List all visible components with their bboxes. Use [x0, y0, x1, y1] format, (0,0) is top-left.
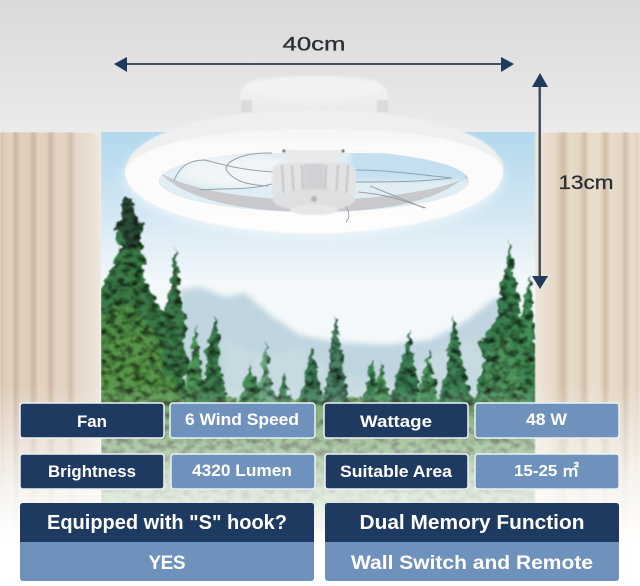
fan blades	[174, 153, 452, 222]
row 1 wattage label	[324, 403, 468, 438]
right curtain	[535, 132, 640, 552]
dual memory card: Dual Memory Function	[360, 511, 584, 534]
spec table	[20, 403, 619, 581]
row 1 fan value: 6 Wind Speed	[185, 411, 299, 429]
S hook card: Equipped with "S" hook?	[47, 511, 287, 534]
row 2 suitable area label: Suitable Area	[340, 462, 453, 481]
mount canopy	[240, 72, 388, 112]
height dimension arrow	[532, 73, 548, 289]
ring opening	[159, 150, 469, 212]
forest	[96, 197, 542, 548]
mountains	[180, 284, 502, 402]
width dimension arrow	[114, 57, 514, 72]
row 2 suitable area value	[475, 454, 619, 489]
row 1 wattage label: Wattage	[360, 412, 432, 431]
row 2 brightness value	[171, 454, 315, 489]
bottom white fade	[0, 385, 640, 540]
left curtain	[0, 132, 101, 552]
ceiling	[0, 0, 640, 132]
row 2 brightness label: Brightness	[48, 462, 136, 481]
row 2 suitable area value: 15-25 ㎡	[514, 461, 579, 480]
row 1 wattage value: 48 W	[526, 411, 567, 429]
motor housing	[272, 150, 356, 215]
outer glow ring	[124, 117, 504, 237]
light ring	[125, 110, 504, 233]
row 2 brightness value: 4320 Lumen	[192, 462, 292, 480]
ceiling edge	[0, 128, 640, 132]
row 1 wattage value	[475, 403, 619, 438]
ceiling fan	[124, 72, 504, 237]
row 2 brightness label	[20, 454, 164, 489]
row 2 suitable area label	[325, 454, 468, 489]
row 1 fan value	[170, 403, 315, 438]
window view	[96, 132, 542, 552]
sky	[101, 132, 537, 344]
S hook card	[20, 503, 314, 581]
S hook card: YES	[148, 553, 186, 574]
height label: 13cm	[558, 173, 614, 194]
width label: 40cm	[282, 34, 346, 56]
row 1 fan label	[20, 403, 164, 438]
dual memory card	[325, 503, 619, 581]
dual memory card: Wall Switch and Remote	[351, 552, 593, 574]
row 1 fan label: Fan	[77, 412, 107, 431]
